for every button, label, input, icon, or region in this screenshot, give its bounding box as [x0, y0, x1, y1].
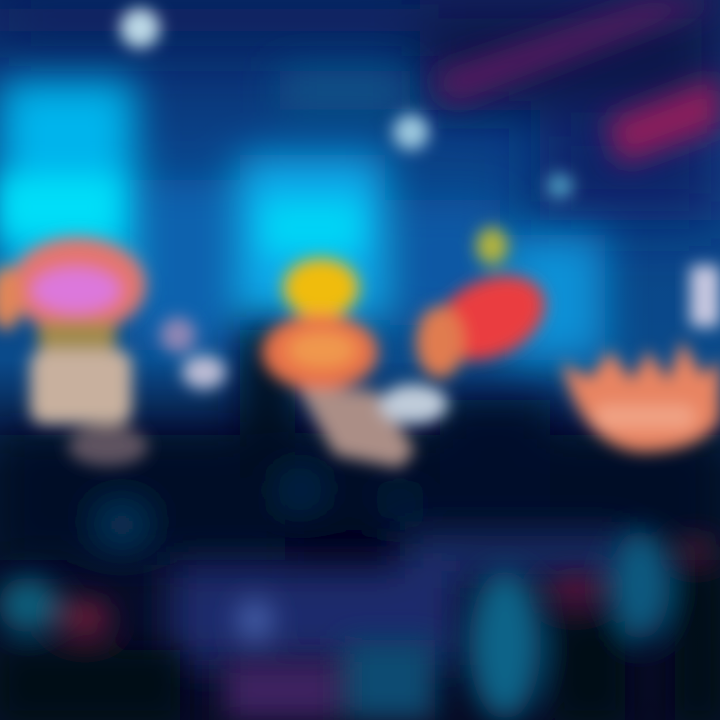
- character: left pink figure: [0, 237, 148, 466]
- side white shape: [380, 384, 448, 424]
- body: [298, 388, 415, 468]
- head: [262, 314, 378, 390]
- top: [476, 227, 508, 265]
- lower dark crowd area: [0, 330, 720, 615]
- face: [32, 268, 120, 312]
- crown band: [595, 405, 695, 429]
- magenta light beams: [430, 0, 720, 165]
- cyan glow panels: [0, 70, 605, 360]
- icon: left small white shape: [160, 317, 226, 389]
- character: center yellow and orange figure: [262, 258, 448, 468]
- bright cyan highlights: [0, 175, 362, 255]
- icon: far right pale block: [690, 265, 720, 327]
- side arm: [0, 266, 22, 330]
- orange side: [416, 306, 464, 378]
- red body: [421, 259, 559, 377]
- audience heads: [0, 530, 720, 720]
- feet: [68, 426, 148, 466]
- belt: [38, 322, 116, 352]
- character: right red figure: [416, 227, 559, 378]
- upper right dark sky: [0, 0, 720, 220]
- body: [30, 350, 132, 424]
- hat: [283, 258, 359, 318]
- stars: [120, 8, 573, 199]
- icon: right orange crown: [562, 340, 720, 452]
- head: [10, 237, 146, 333]
- foreground audience: [170, 535, 630, 665]
